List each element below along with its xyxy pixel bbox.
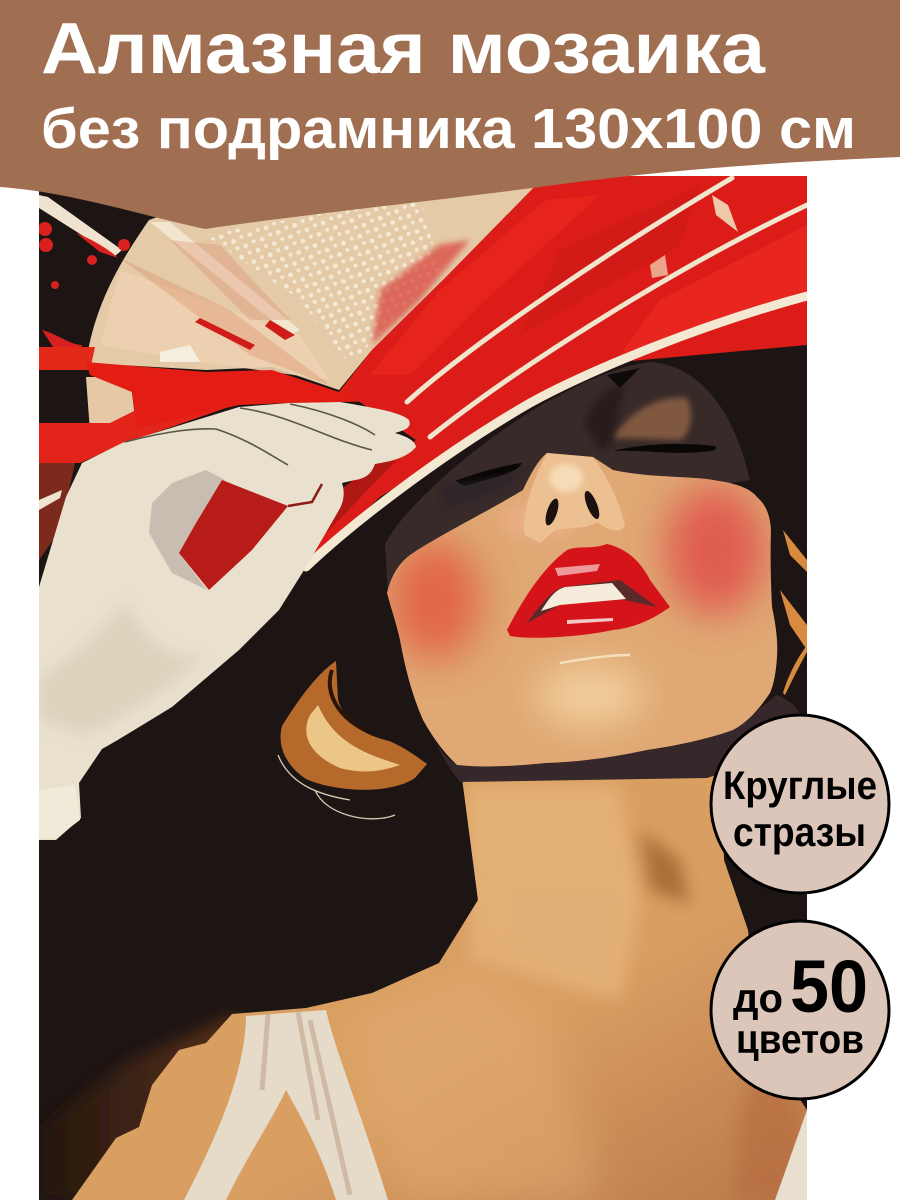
- face: lips: [507, 544, 670, 638]
- face: [380, 368, 790, 780]
- jaw shadow: [425, 695, 800, 782]
- face: eyelid: [613, 398, 691, 440]
- shoulder shadow glow: [39, 1015, 260, 1200]
- top left splashes: [38, 195, 130, 362]
- neck and chest: [72, 770, 807, 1200]
- hair right: [780, 530, 807, 695]
- glove: palm inside: [149, 470, 225, 590]
- hat: red band left: [86, 350, 372, 411]
- hair curl left: [278, 661, 427, 819]
- badge: up to 50 colours: 50: [790, 945, 868, 1028]
- hat: white stripes: [306, 178, 807, 567]
- face: chin crease: [560, 655, 630, 663]
- dress strap: [184, 1010, 388, 1200]
- badge: round rhinestones: стразы: [733, 809, 866, 855]
- neck shading: [340, 785, 800, 1200]
- header banner: [0, 0, 900, 229]
- hat: dark red under fingers: [325, 440, 416, 534]
- painting: woman in red hat: [38, 176, 807, 1200]
- hat: black and red left edge: [39, 347, 240, 560]
- hat: cream crown: [86, 188, 534, 423]
- face: eyelashes: [613, 444, 716, 453]
- badge: up to 50 colours: [711, 921, 889, 1099]
- face: nose: [524, 453, 625, 543]
- dress right: [775, 1110, 807, 1200]
- face: blush: [390, 540, 480, 660]
- badge: up to 50 colours: цветов: [736, 1016, 864, 1062]
- hat: red brim: [306, 176, 807, 567]
- upper face shadow: [385, 362, 750, 595]
- badge: round rhinestones: [711, 715, 889, 893]
- glove: red seen through fingers: [179, 480, 288, 590]
- glove: [39, 402, 416, 840]
- badge: up to 50 colours: до: [733, 975, 783, 1021]
- badge: round rhinestones: Круглые: [723, 764, 877, 808]
- title: Алмазная мозаика: [41, 9, 766, 89]
- subtitle: без подрамника 130х100 см: [41, 97, 856, 161]
